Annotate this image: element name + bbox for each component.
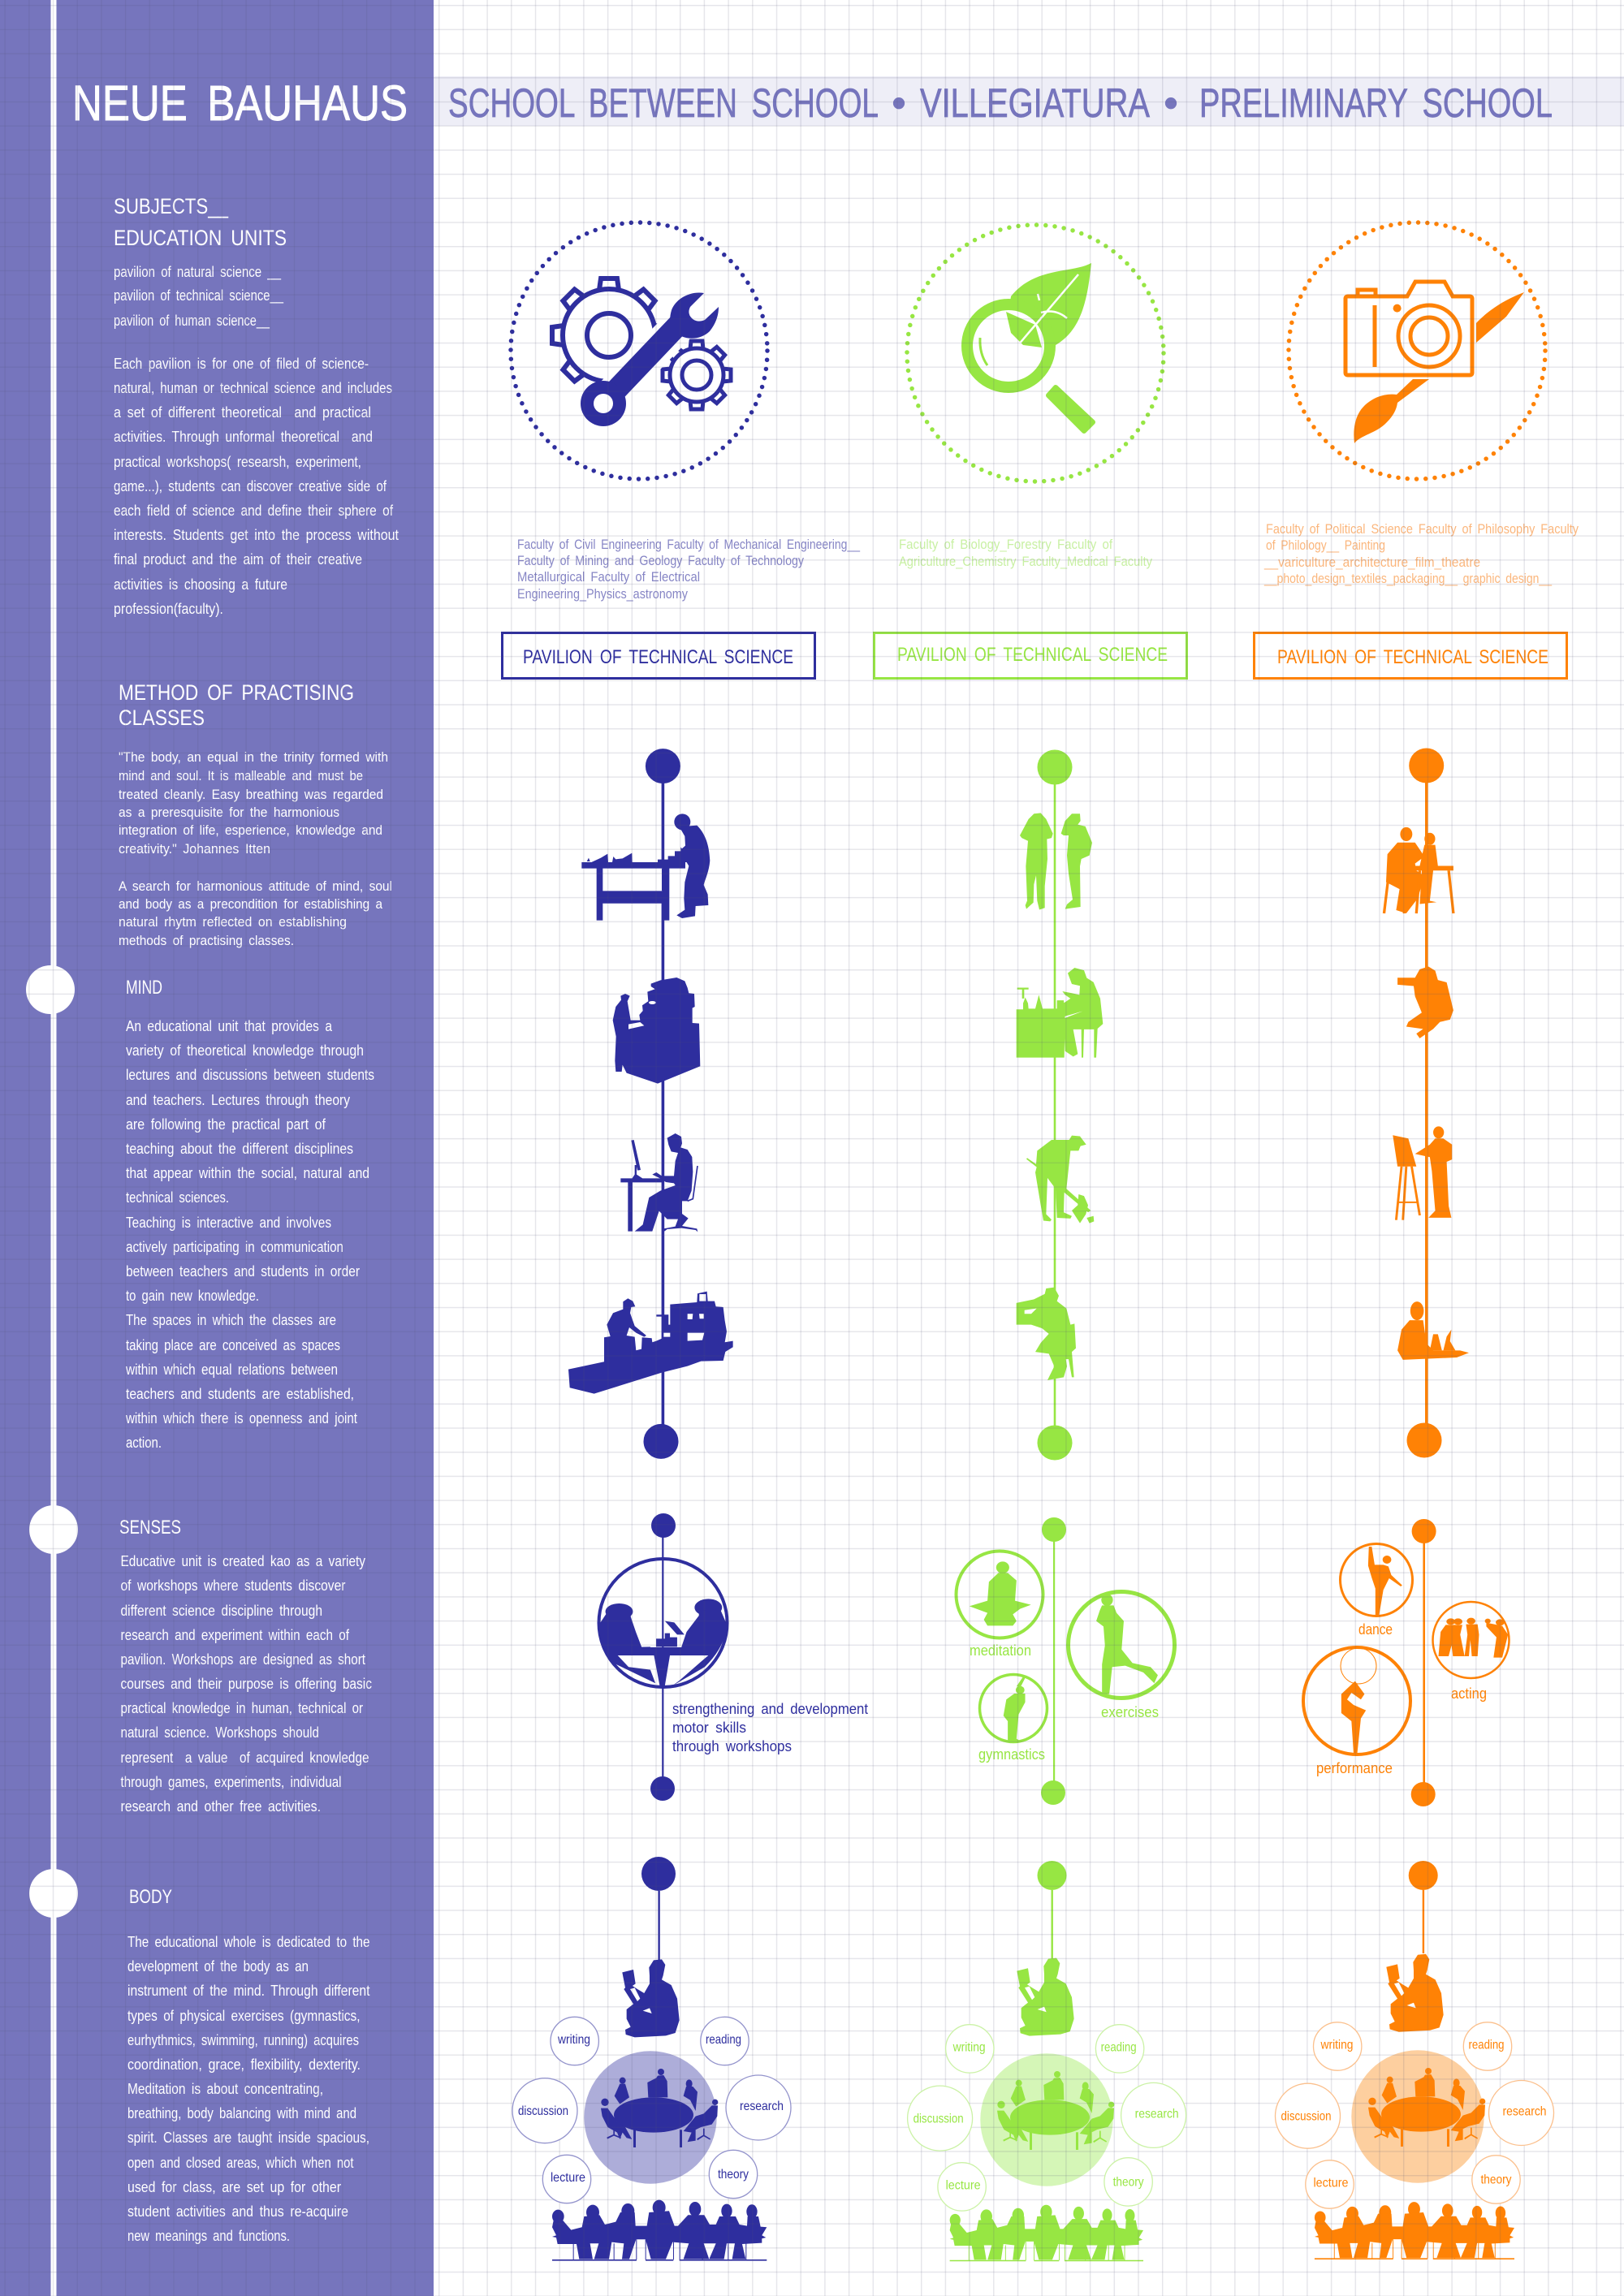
- mind column: natural silhouettes on timeline: [1017, 750, 1103, 1460]
- chart: central meeting circle: [584, 2051, 718, 2184]
- text block: pavilion list: pavilion of technical science__: [114, 287, 284, 304]
- text block: mind: between teachers and students in order: [126, 1263, 360, 1280]
- text block: senses: courses and their purpose is offering basic: [120, 1676, 372, 1692]
- icon: gymnastics: [978, 1674, 1047, 1763]
- header subtitle: •: [1164, 80, 1178, 126]
- text block: body: spirit. Classes are taught inside spacious,: [127, 2130, 369, 2146]
- icon: photographer: [1397, 966, 1453, 1038]
- icon: reader: [622, 1959, 680, 2037]
- icon: two people at table: [599, 1599, 727, 1686]
- text: workshops note: strengthening and development: [672, 1701, 868, 1717]
- bubbles: natural activities: theory: [1113, 2175, 1144, 2189]
- bubbles: technical activities: discussion: [518, 2104, 568, 2118]
- text block: Itten quote: "The body, an equal in the trinity formed with: [119, 749, 388, 765]
- mind column: technical silhouettes on timeline: [568, 749, 733, 1459]
- text block: Itten quote: treated cleanly. Easy breathing was regarded: [119, 787, 383, 802]
- icon: painter at easel: [1393, 1126, 1452, 1220]
- timeline: white vertical bar with nodes: [26, 0, 78, 2296]
- text block: mind: action.: [126, 1435, 162, 1451]
- icon: team at table: [552, 2200, 767, 2261]
- text block: senses: different science discipline through: [120, 1603, 322, 1619]
- icon: lab worker: [1017, 968, 1103, 1058]
- text block: subjects description: game...), students can discover creative side of: [114, 478, 387, 494]
- icon: performance: [1303, 1647, 1410, 1776]
- header subtitle: SCHOOL BETWEEN SCHOOL: [448, 80, 879, 126]
- text block: mind: technical sciences.: [126, 1189, 229, 1206]
- bubbles: human activities: discussion: [1281, 2109, 1332, 2124]
- chart: central meeting circle: [1351, 2050, 1485, 2183]
- text block: mind: actively participating in communication: [126, 1239, 343, 1255]
- bubbles: human activities: writing: [1320, 2038, 1353, 2052]
- icon: meditation: meditation: [970, 1642, 1031, 1659]
- text: faculties human: __variculture_architecture_film_theatre: [1263, 555, 1480, 570]
- icon: person at computer: [620, 1133, 698, 1232]
- bubbles: natural activities: discussion: [914, 2112, 964, 2126]
- text block: mind: [125, 1018, 374, 1451]
- icon: carpenter at workbench: [581, 814, 710, 921]
- bubbles: human activities: reading: [1468, 2038, 1504, 2052]
- text block: harmonious attitude: A search for harmonious attitude of mind, soul: [119, 878, 392, 894]
- text block: pavilion list: pavilion of natural science __: [114, 264, 282, 281]
- text block: mind: within which there is openness and joint: [125, 1410, 357, 1426]
- text: faculties technical: Metallurgical Faculty of Electrical: [517, 569, 700, 585]
- text: workshops note: through workshops: [672, 1738, 792, 1754]
- text block: mind: lectures and discussions between students: [126, 1067, 374, 1083]
- bubbles: technical activities: [512, 2017, 791, 2203]
- icon: operator at lathe: [568, 1292, 733, 1394]
- heading: subjects: [114, 194, 287, 250]
- icon: leaf and magnifier in dotted circle: [907, 225, 1164, 481]
- text block: mind: and teachers. Lectures through theory: [126, 1092, 350, 1108]
- text block: body: types of physical exercises (gymnastics,: [127, 2008, 361, 2024]
- text block: Itten quote: as a preresquisite for the harmonious: [119, 805, 339, 820]
- senses column: natural circles: [957, 1517, 1174, 1805]
- icon: camera and brush in dotted circle: [1289, 222, 1545, 479]
- icon: gardener: [1026, 1136, 1094, 1224]
- bubbles: natural activities: research: [1135, 2107, 1179, 2121]
- icon: two people at cafe table: [1384, 827, 1453, 913]
- heading: method of practising classes: CLASSES: [119, 706, 205, 730]
- text block: mind: taking place are conceived as spaces: [126, 1337, 340, 1353]
- text block: mind: teaching about the different disciplines: [126, 1141, 353, 1157]
- bubbles: human activities: lecture: [1314, 2176, 1349, 2190]
- heading: method of practising classes: METHOD OF PRACTISING: [119, 680, 354, 705]
- text block: Itten quote: mind and soul. It is malleable and must be: [119, 768, 363, 783]
- icon: reader: [1386, 1954, 1444, 2032]
- label box: orange pavilion: [1254, 633, 1567, 679]
- text block: senses: [120, 1553, 372, 1815]
- icon: gymnastics: gymnastics: [978, 1746, 1045, 1763]
- bubbles: human activities: [1275, 2022, 1554, 2208]
- text: faculties human: Faculty of Political Science Faculty of Philosophy Faculty: [1266, 521, 1579, 537]
- bubbles: technical activities: lecture: [551, 2171, 585, 2185]
- icon: two hikers: [1020, 813, 1092, 910]
- text block: body: new meanings and functions.: [127, 2228, 290, 2244]
- text block: pavilion list: pavilion of human science__: [114, 313, 270, 330]
- text block: senses: natural science. Workshops should: [120, 1724, 319, 1741]
- heading: body: BODY: [129, 1886, 172, 1908]
- left panel background: [0, 0, 434, 2296]
- text block: mind: within which equal relations between: [125, 1362, 338, 1378]
- bubbles: technical activities: research: [740, 2100, 784, 2113]
- text block: mind: are following the practical part of: [126, 1116, 326, 1133]
- icon: performance: performance: [1316, 1760, 1393, 1776]
- heading: subjects: EDUCATION UNITS: [114, 226, 287, 250]
- text block: subjects description: activities. Through unformal theoretical and: [114, 429, 373, 445]
- bubbles: technical activities: writing: [557, 2033, 590, 2047]
- text block: mind: to gain new knowledge.: [126, 1288, 259, 1304]
- text: faculties human: of Philology__ Painting: [1266, 537, 1385, 553]
- text block: mind: teachers and students are established,: [126, 1386, 354, 1402]
- text: faculties natural: Faculty of Biology_Forestry Faculty of: [899, 537, 1112, 552]
- text block: senses: Educative unit is created kao as a variety: [120, 1553, 365, 1569]
- text block: subjects description: Each pavilion is for one of filed of science-: [114, 356, 369, 372]
- title: NEUE BAUHAUS: [72, 76, 408, 131]
- text block: subjects description: final product and the aim of their creative: [114, 551, 362, 568]
- bubbles: human activities: theory: [1481, 2173, 1512, 2187]
- text block: pavilion list: [114, 264, 284, 330]
- text block: body: used for class, are set up for other: [127, 2179, 341, 2195]
- senses column: human circles: [1303, 1519, 1509, 1806]
- icon: operator at machine: [613, 978, 700, 1084]
- text block: subjects description: [114, 356, 399, 617]
- text block: body: [127, 1934, 370, 2244]
- icon: seated reader: [1397, 1301, 1469, 1360]
- text block: senses: practical knowledge in human, technical or: [120, 1700, 363, 1716]
- icon: dance: [1340, 1544, 1413, 1638]
- text block: mind: An educational unit that provides a: [126, 1018, 333, 1034]
- bubbles: technical activities: theory: [718, 2168, 749, 2182]
- text block: subjects description: a set of different theoretical and practical: [114, 404, 371, 421]
- header subtitle: VILLEGIATURA: [920, 80, 1151, 126]
- text block: senses: of workshops where students discover: [120, 1577, 346, 1594]
- text: faculties technical: Faculty of Mining and Geology Faculty of Technology: [517, 553, 804, 568]
- text block: subjects description: interests. Students get into the process without: [114, 527, 399, 543]
- text: workshops note: motor skills: [672, 1720, 746, 1736]
- text block: senses: research and experiment within each of: [120, 1627, 350, 1643]
- text block: body: student activities and thus re-acquire: [127, 2203, 348, 2220]
- text block: senses: research and other free activities.: [120, 1798, 321, 1815]
- text block: senses: through games, experiments, individual: [120, 1774, 341, 1790]
- mind column: human silhouettes on timeline: [1384, 749, 1469, 1458]
- text block: body: The educational whole is dedicated to the: [127, 1934, 370, 1950]
- heading: subjects: SUBJECTS__: [114, 194, 229, 218]
- label box: green pavilion: PAVILION OF TECHNICAL SCIENCE: [897, 644, 1168, 666]
- heading: method of practising classes: [119, 680, 354, 730]
- header subtitle: [448, 80, 1553, 126]
- text block: harmonious attitude: and body as a precondition for establishing a: [119, 896, 382, 912]
- text block: subjects description: natural, human or technical science and includes: [114, 380, 392, 396]
- text: faculties human: [1263, 521, 1579, 586]
- icon: person at microscope: [1017, 1288, 1076, 1380]
- icon: team at table: [1315, 2202, 1514, 2259]
- text: faculties technical: Engineering_Physics_astronomy: [517, 586, 688, 602]
- bubbles: natural activities: reading: [1101, 2040, 1137, 2054]
- label box: technical pavilion: [502, 633, 815, 679]
- text: faculties human: __photo_design_textiles_packaging__ graphic design__: [1263, 571, 1552, 586]
- body column: human figures: [1315, 1861, 1514, 2259]
- body column: technical figures: [552, 1857, 767, 2261]
- icon: team at table: [950, 2205, 1143, 2261]
- text block: harmonious attitude: natural rhytm reflected on establishing: [119, 914, 347, 930]
- text block: body: coordination, grace, flexibility, dexterity.: [127, 2056, 361, 2073]
- text block: body: breathing, body balancing with mind and: [127, 2105, 356, 2121]
- text block: senses: pavilion. Workshops are designed as short: [120, 1651, 365, 1668]
- bubbles: natural activities: [908, 2025, 1186, 2211]
- text block: mind: Teaching is interactive and involves: [126, 1215, 331, 1231]
- heading: mind: MIND: [126, 977, 162, 999]
- text block: subjects description: each field of science and define their sphere of: [114, 503, 394, 519]
- text block: subjects description: profession(faculty).: [114, 601, 223, 617]
- text block: Itten quote: integration of life, esperience, knowledge and: [119, 822, 382, 838]
- text: faculties natural: Agriculture_Chemistry Faculty_Medical Faculty: [899, 554, 1152, 569]
- text block: mind: The spaces in which the classes are: [126, 1312, 336, 1328]
- text block: Itten quote: creativity." Johannes Itten: [119, 841, 270, 857]
- text: faculties technical: [517, 537, 860, 602]
- icon: acting: [1432, 1602, 1509, 1702]
- icon: dance: dance: [1358, 1621, 1393, 1638]
- icon: exercises: [1069, 1591, 1174, 1720]
- header band: [434, 76, 1624, 126]
- bubbles: human activities: research: [1502, 2104, 1546, 2119]
- icon: exercises: exercises: [1101, 1704, 1159, 1720]
- text block: body: open and closed areas, which when not: [127, 2155, 354, 2171]
- bubbles: natural activities: lecture: [946, 2178, 981, 2192]
- text block: harmonious attitude: methods of practising classes.: [119, 933, 294, 948]
- heading: senses: SENSES: [119, 1517, 181, 1539]
- icon: tools in dotted circle: [511, 222, 767, 479]
- text block: body: instrument of the mind. Through different: [127, 1983, 370, 1999]
- chart: central meeting circle: [980, 2053, 1114, 2186]
- text block: Itten quote: [119, 749, 388, 857]
- text block: mind: variety of theoretical knowledge through: [126, 1042, 364, 1059]
- text block: subjects description: activities is choosing a future: [114, 576, 287, 593]
- label box: technical pavilion: PAVILION OF TECHNICAL SCIENCE: [523, 646, 793, 668]
- text: faculties natural: [899, 537, 1152, 569]
- label box: orange pavilion: PAVILION OF TECHNICAL SCIENCE: [1277, 646, 1548, 668]
- senses column: technical circle: [599, 1513, 868, 1801]
- text block: mind: that appear within the social, natural and: [126, 1165, 369, 1181]
- text block: body: development of the body as an: [127, 1958, 309, 1974]
- text block: body: eurhythmics, swimming, running) acquires: [127, 2032, 359, 2048]
- text block: subjects description: practical workshops( researsh, experiment,: [114, 454, 361, 470]
- bubbles: natural activities: writing: [952, 2040, 986, 2054]
- icon: acting: acting: [1451, 1685, 1487, 1702]
- label box: green pavilion: [874, 633, 1187, 679]
- text: faculties technical: Faculty of Civil Engineering Faculty of Mechanical Engineering__: [517, 537, 860, 552]
- text: workshops note: [672, 1701, 868, 1754]
- body column: natural figures: [950, 1861, 1143, 2261]
- bubbles: technical activities: reading: [706, 2033, 741, 2047]
- text block: harmonious attitude: [119, 878, 392, 948]
- text block: senses: represent a value of acquired knowledge: [120, 1750, 369, 1766]
- text block: body: Meditation is about concentrating,: [127, 2081, 323, 2097]
- icon: reader: [1017, 1958, 1074, 2036]
- icon: meditation: [957, 1551, 1043, 1659]
- header subtitle: •: [892, 80, 906, 126]
